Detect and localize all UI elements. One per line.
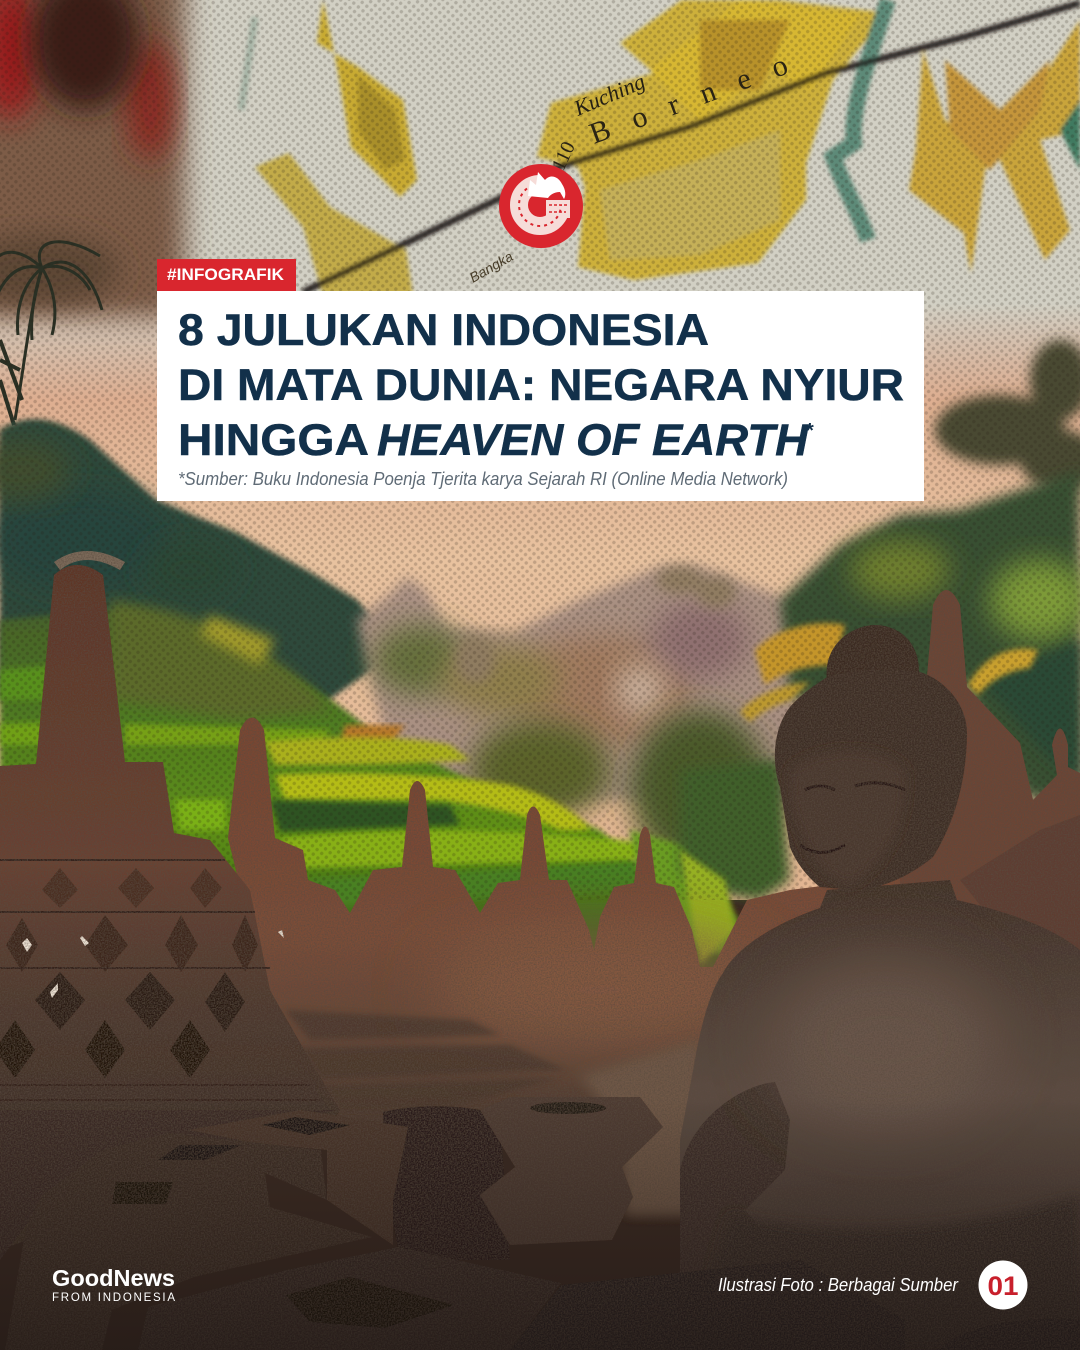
ledges on stupa bbox=[0, 860, 320, 1100]
source note: *Sumber: Buku Indonesia Poenja Tjerita karya Sejarah RI (Online Media Network) bbox=[178, 469, 788, 489]
rice terraces bbox=[0, 600, 760, 970]
title panel bbox=[157, 291, 924, 501]
photo credit: Ilustrasi Foto : Berbagai Sumber bbox=[718, 1275, 959, 1295]
mesh texture over the photo bbox=[0, 0, 1080, 900]
light specks bbox=[22, 930, 284, 998]
stone vessel bbox=[480, 1097, 663, 1245]
statue face bbox=[790, 751, 905, 885]
map of Borneo region bbox=[0, 0, 1080, 400]
statue body bbox=[680, 880, 1080, 1350]
headline: HEAVEN OF EARTH bbox=[377, 416, 809, 465]
stupa row bbox=[228, 718, 970, 1140]
distant mountain and forest bbox=[357, 566, 800, 870]
statue head bbox=[775, 669, 967, 890]
stone block left bbox=[5, 1133, 372, 1350]
hashtag label: #INFOGRAFIK bbox=[167, 265, 285, 284]
GoodNews wordmark: FROM INDONESIA bbox=[52, 1292, 175, 1304]
large stupa at left bbox=[0, 565, 340, 1250]
eagle head bbox=[528, 172, 565, 199]
headline: HINGGA bbox=[178, 416, 369, 465]
right stupa behind statue bbox=[900, 590, 1080, 960]
headline: DI MATA DUNIA: NEGARA NYIUR bbox=[178, 361, 904, 410]
map of Borneo region: Kuching bbox=[569, 68, 649, 121]
bottom vignette bbox=[0, 1100, 1080, 1350]
headline bbox=[178, 306, 904, 465]
stone block front bbox=[138, 1247, 561, 1350]
ground haze bbox=[430, 930, 770, 1050]
stupa cap bbox=[54, 551, 125, 570]
stupa lattice holes bbox=[0, 868, 258, 1078]
lower stupa base bbox=[0, 1110, 335, 1260]
GoodNews wordmark: GoodNews bbox=[52, 1265, 175, 1291]
hashtag label bbox=[157, 259, 296, 291]
floor patch bbox=[580, 1040, 700, 1215]
GoodNews wordmark bbox=[52, 1265, 175, 1304]
foreground stone blocks bbox=[0, 1097, 1080, 1350]
headline: * bbox=[806, 420, 814, 442]
palm fronds bbox=[740, 623, 1038, 722]
distant palms bbox=[455, 566, 736, 684]
statue facial features bbox=[800, 783, 905, 852]
stone block middle bbox=[189, 1110, 408, 1245]
background photo collage bbox=[0, 0, 1080, 970]
left palm tree bbox=[0, 242, 102, 425]
page number bbox=[978, 1260, 1028, 1310]
statue hands bbox=[680, 1082, 810, 1290]
stone block right bbox=[510, 1260, 905, 1350]
left forest hill bbox=[0, 419, 400, 720]
chest light bbox=[770, 955, 1000, 1125]
G ring bbox=[519, 184, 561, 226]
map of Borneo region: Borneo bbox=[585, 40, 815, 151]
page number: 01 bbox=[988, 1271, 1018, 1301]
map of Borneo region: 110 bbox=[548, 138, 580, 174]
temple stupas bbox=[0, 551, 1080, 1250]
right tree cluster bbox=[680, 340, 1080, 965]
dark stone vessel bbox=[383, 1106, 510, 1260]
lower distant stupa bands bbox=[285, 1010, 566, 1110]
Buddha statue bbox=[680, 625, 1080, 1350]
map of Borneo region: Bangka bbox=[466, 248, 516, 286]
blurred red object at top left bbox=[0, 0, 185, 320]
logo badge bbox=[499, 164, 583, 248]
headline: 8 JULUKAN INDONESIA bbox=[178, 306, 709, 355]
sky backdrop bbox=[0, 0, 1080, 900]
statue ushnisha bbox=[826, 625, 919, 682]
